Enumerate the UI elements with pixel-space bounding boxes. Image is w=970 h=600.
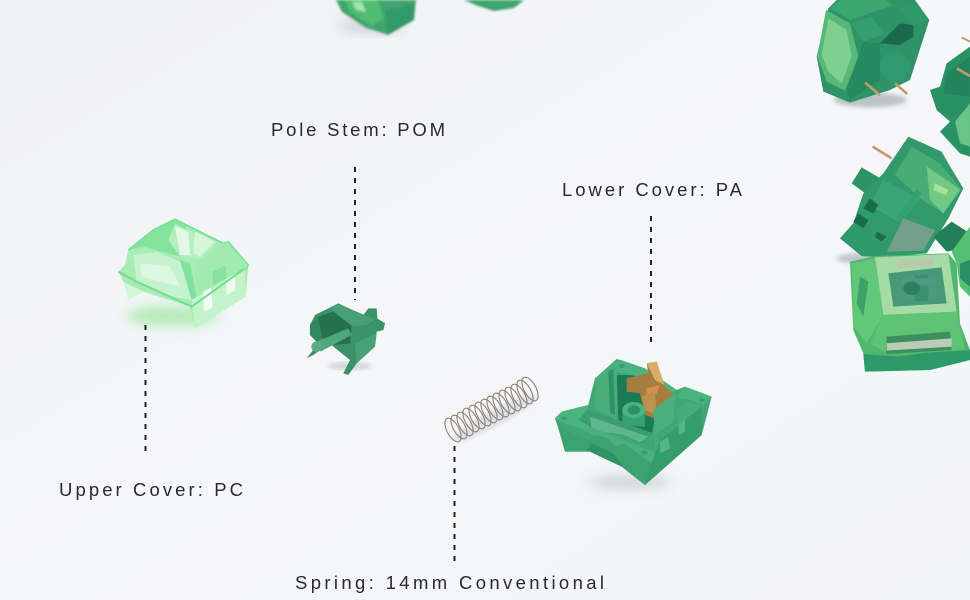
part: spring [442,375,541,448]
switch: far right partial [952,227,970,297]
part: pole stem [307,303,385,375]
switch: top right back view [817,0,929,107]
switch: far right back view [930,37,970,157]
label: upper cover: Upper Cover: PC [59,479,243,500]
label: pole stem: Pole Stem: POM [271,119,445,140]
leader line: pole stem [354,167,356,300]
switch: middle right side view [837,137,970,264]
label: lower cover: Lower Cover: PA [562,179,743,200]
leader line: spring [454,446,456,562]
leader line: upper cover [144,325,146,457]
switch fragments at top edge [336,0,524,35]
label: spring: Spring: 14mm Conventional [295,572,604,593]
part: upper cover [118,219,248,328]
switch: front right top view [850,253,970,372]
part: lower cover [555,359,712,489]
leader line: lower cover [650,216,652,348]
